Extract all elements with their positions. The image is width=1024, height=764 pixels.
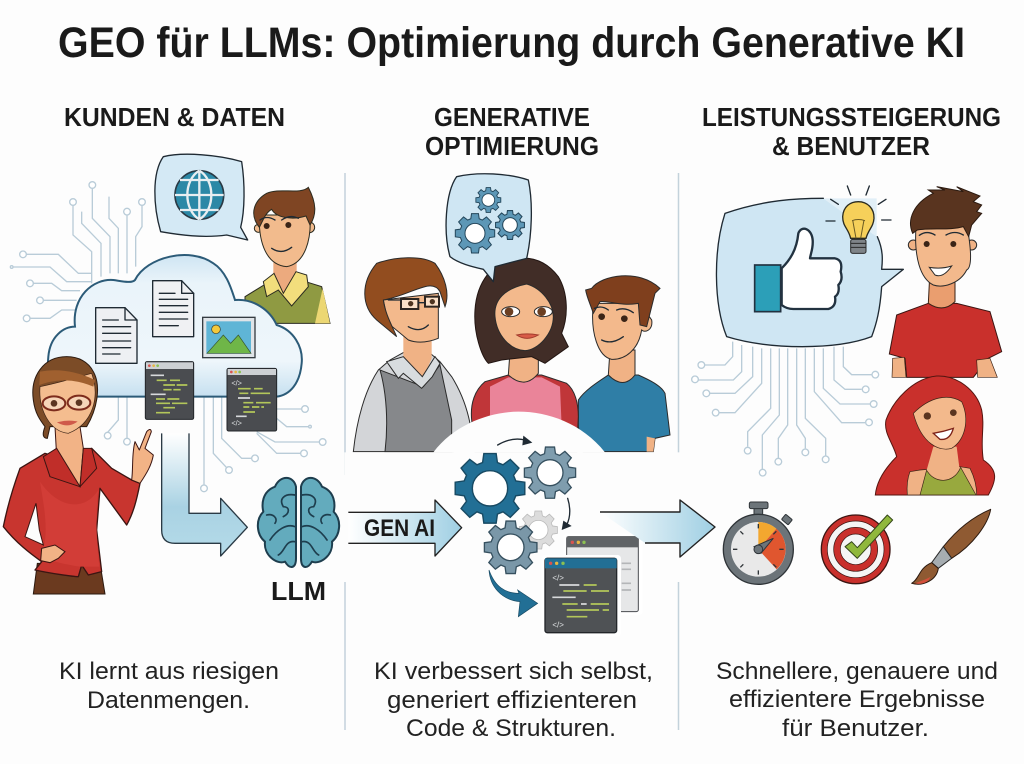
- cloud with documents: [48, 255, 302, 431]
- icon: document middle: [153, 281, 194, 337]
- caption: Leistungssteigerung: für Benutzer.: [782, 715, 929, 742]
- caption: Leistungssteigerung: effizientere Ergebnisse: [729, 686, 985, 713]
- icon: code window two: [227, 368, 277, 431]
- icon: document left: [96, 308, 137, 363]
- label: LLM: LLM: [271, 576, 326, 606]
- icon: target with check mark: [821, 515, 893, 584]
- icon: thumb up: [755, 229, 842, 312]
- panel: Kunden und Daten illustration: [3, 154, 330, 594]
- circuit lines: [692, 342, 879, 476]
- icon: light bulb: [826, 186, 891, 253]
- woman with red blouse pointing: [3, 357, 153, 594]
- icon: brain: [258, 478, 339, 567]
- code window back: [563, 533, 643, 615]
- caption: Leistungssteigerung: Schnellere, genauere und: [716, 658, 998, 685]
- woman with red hair: [875, 376, 995, 495]
- panel: Leistungssteigerung illustration: [692, 186, 1002, 584]
- arrow cloud to LLM: [162, 433, 247, 556]
- caption: Generative Optimierung: Code & Strukturen.: [406, 715, 616, 742]
- speech bubble with thumb up: [716, 198, 903, 347]
- icon: picture: [203, 317, 255, 358]
- heading: Leistungssteigerung und Benutzer: [702, 102, 1001, 161]
- curved arrow blue: [489, 570, 538, 617]
- man with red shirt: [889, 187, 1002, 377]
- man with green vest: [245, 187, 330, 323]
- curved arrow top: [498, 439, 525, 445]
- heading: Generative Optimierung: GENERATIVE: [434, 102, 590, 132]
- arrow: GEN AI: [348, 500, 462, 556]
- gears cycle: [455, 436, 576, 617]
- arrow to results: [600, 500, 715, 557]
- heading: Kunden und Daten: KUNDEN & DATEN: [64, 102, 285, 132]
- circuit lines around cloud: [10, 182, 326, 492]
- caption: Kunden und Daten: [59, 658, 279, 714]
- caption: Generative Optimierung: KI verbessert sich selbst,: [374, 658, 653, 685]
- caption: Leistungssteigerung: [716, 658, 998, 742]
- caption: Generative Optimierung: [374, 658, 653, 742]
- heading: Leistungssteigerung und Benutzer: LEISTUNGSSTEIGERUNG: [702, 102, 1001, 132]
- icon: code window two: </>: [231, 419, 242, 428]
- caption: Generative Optimierung: generiert effizienteren: [387, 687, 637, 714]
- title: GEO für LLMs: Optimierung durch Generative KI: [58, 19, 965, 67]
- icon: stopwatch: [723, 502, 793, 584]
- heading: Generative Optimierung: [425, 102, 599, 161]
- caption: Kunden und Daten: KI lernt aus riesigen: [59, 658, 279, 685]
- heading: Leistungssteigerung und Benutzer: & BENUTZER: [772, 131, 930, 161]
- heading: Generative Optimierung: OPTIMIERUNG: [425, 131, 599, 161]
- right man with blue shirt: [578, 276, 670, 452]
- speech bubble with globe: [155, 154, 248, 240]
- panel: Generative Optimierung illustration: [344, 174, 681, 637]
- icon: code window two: </>: [231, 378, 242, 387]
- curved arrow right: [567, 498, 570, 525]
- white dome behind lower gears: [433, 412, 605, 452]
- icon: paint brush: [912, 509, 991, 584]
- code window front: </>: [552, 620, 564, 629]
- left man with glasses: [353, 258, 470, 452]
- speech bubble with gears: [446, 174, 531, 282]
- code window front: </>: [552, 574, 564, 583]
- code window front: [542, 555, 621, 637]
- icon: code window one: [145, 362, 194, 419]
- caption: Kunden und Daten: Datenmengen.: [87, 687, 250, 714]
- label: GEN AI: GEN AI: [364, 515, 435, 542]
- middle woman with pink shirt: [471, 258, 578, 452]
